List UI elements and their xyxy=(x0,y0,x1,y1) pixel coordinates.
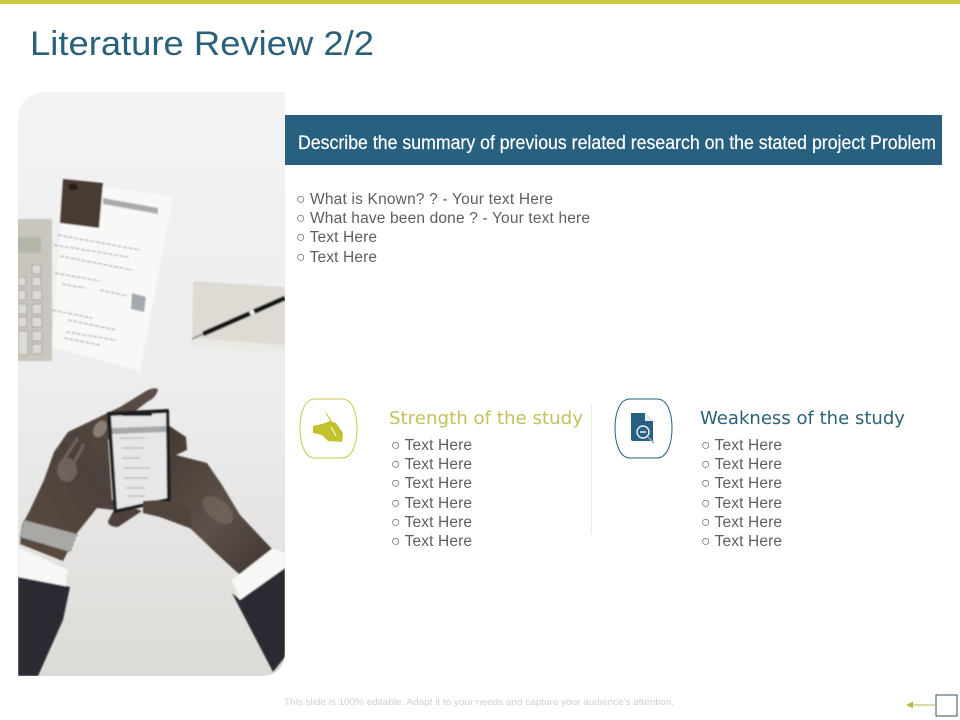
footer note: This slide is 100% editable. Adapt it to your needs and capture your audience's attention. xyxy=(284,697,674,708)
top accent bar xyxy=(0,0,960,4)
strength list: ○ Text Here xyxy=(391,533,472,550)
intro bullet list: ○ What is Known? ? - Your text Here xyxy=(296,191,553,208)
notebook and pen xyxy=(192,281,285,352)
title: Literature Review 2/2 xyxy=(30,25,374,63)
left shirt cuff xyxy=(18,547,68,590)
weakness list: ○ Text Here xyxy=(701,456,782,473)
wooden block xyxy=(60,179,103,228)
weakness list: ○ Text Here xyxy=(701,475,782,492)
strength list: ○ Text Here xyxy=(391,456,472,473)
watch xyxy=(20,520,77,552)
right sleeve xyxy=(232,568,285,672)
strength list: ○ Text Here xyxy=(391,495,472,512)
weakness list: ○ Text Here xyxy=(701,437,782,454)
intro bullet list: ○ Text Here xyxy=(296,249,377,266)
banner xyxy=(285,115,942,165)
weakness list xyxy=(701,437,782,550)
left sleeve xyxy=(18,577,70,676)
right hand xyxy=(168,425,272,575)
weakness list: ○ Text Here xyxy=(701,514,782,531)
navigation arrow and square xyxy=(906,695,957,716)
weakness list: ○ Text Here xyxy=(701,495,782,512)
strength list: ○ Text Here xyxy=(391,437,472,454)
thumb xyxy=(143,500,192,529)
calculator xyxy=(18,218,52,362)
intro bullet list: ○ What have been done ? - Your text here xyxy=(296,210,590,227)
intro bullet list xyxy=(296,191,590,266)
icon: weakness document with magnifier xyxy=(615,399,672,458)
strength list xyxy=(391,437,472,550)
right shirt cuff xyxy=(232,548,285,600)
paper note xyxy=(52,180,173,371)
strength list: ○ Text Here xyxy=(391,475,472,492)
photo: hands holding phone on desk xyxy=(10,92,285,676)
heading: weakness: Weakness of the study xyxy=(700,408,905,429)
weakness list: ○ Text Here xyxy=(701,533,782,550)
left hand xyxy=(20,388,158,561)
heading: strength: Strength of the study xyxy=(389,408,583,429)
icon: strength hand with pen xyxy=(300,399,357,458)
strength list: ○ Text Here xyxy=(391,514,472,531)
phone xyxy=(108,410,170,512)
intro bullet list: ○ Text Here xyxy=(296,229,377,246)
